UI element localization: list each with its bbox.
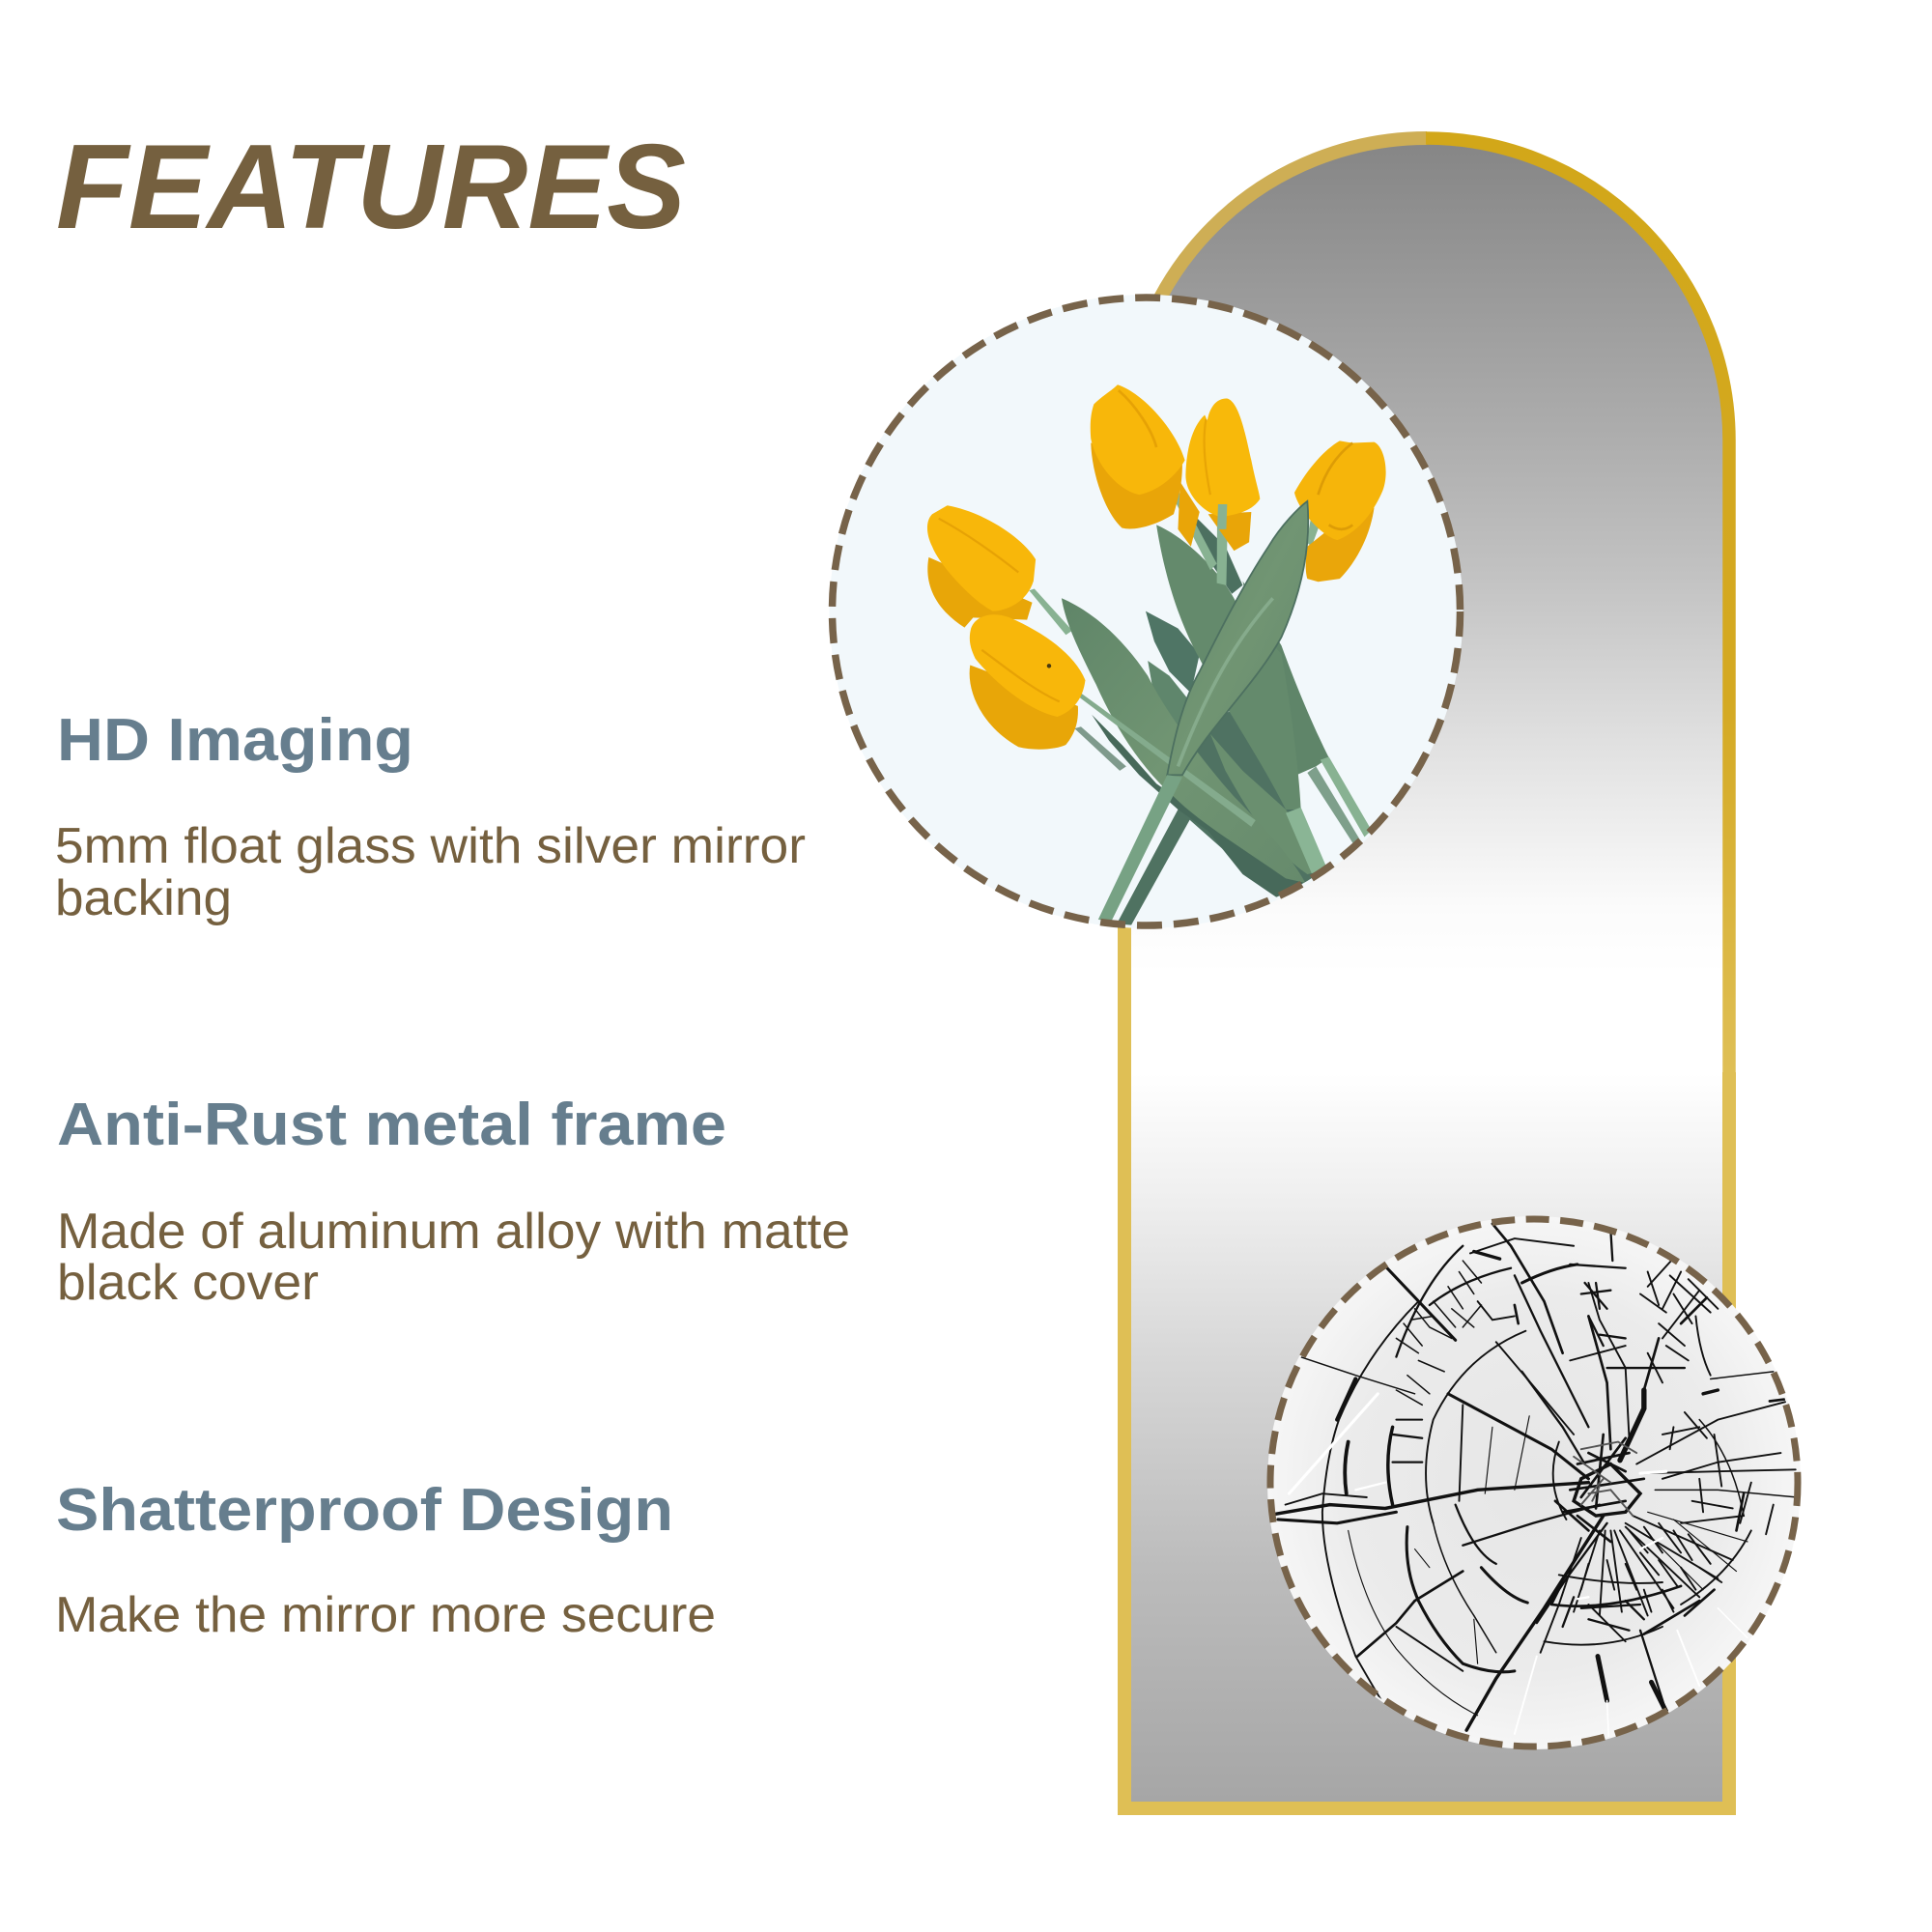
tulip: right <box>1294 440 1386 582</box>
circle callout: shattered glass <box>1267 1216 1801 1749</box>
highlights on cracks <box>1289 1394 1747 1742</box>
feature: Shatterproof Design <box>55 1477 716 1643</box>
heading: HD Imaging: HD Imaging <box>57 707 413 774</box>
arched mirror <box>1118 138 1735 1815</box>
tulip leaves and stems <box>1029 475 1372 930</box>
circle callout: yellow tulips <box>829 295 1463 930</box>
description: Shatterproof Design: Make the mirror more secure <box>55 1587 716 1643</box>
tulip: lower left <box>970 614 1085 750</box>
shatter cracks <box>1276 1224 1798 1730</box>
tulip: top middle <box>1178 399 1260 551</box>
feature: HD Imaging <box>55 707 806 926</box>
description: HD Imaging: 5mm float glass with silver mirror <box>55 818 806 874</box>
feature: Anti-Rust metal frame <box>57 1092 850 1311</box>
heading: Anti-Rust metal frame: Anti-Rust metal frame <box>57 1092 726 1158</box>
description: HD Imaging: backing <box>55 870 232 926</box>
title: FEATURES <box>56 121 686 254</box>
heading: Shatterproof Design: Shatterproof Design <box>56 1477 673 1544</box>
tulip: top left <box>1091 384 1185 528</box>
tulip: left <box>927 505 1036 628</box>
description: Anti-Rust metal frame: black cover <box>57 1255 319 1311</box>
description: Anti-Rust metal frame: Made of aluminum alloy with matte <box>57 1204 850 1260</box>
